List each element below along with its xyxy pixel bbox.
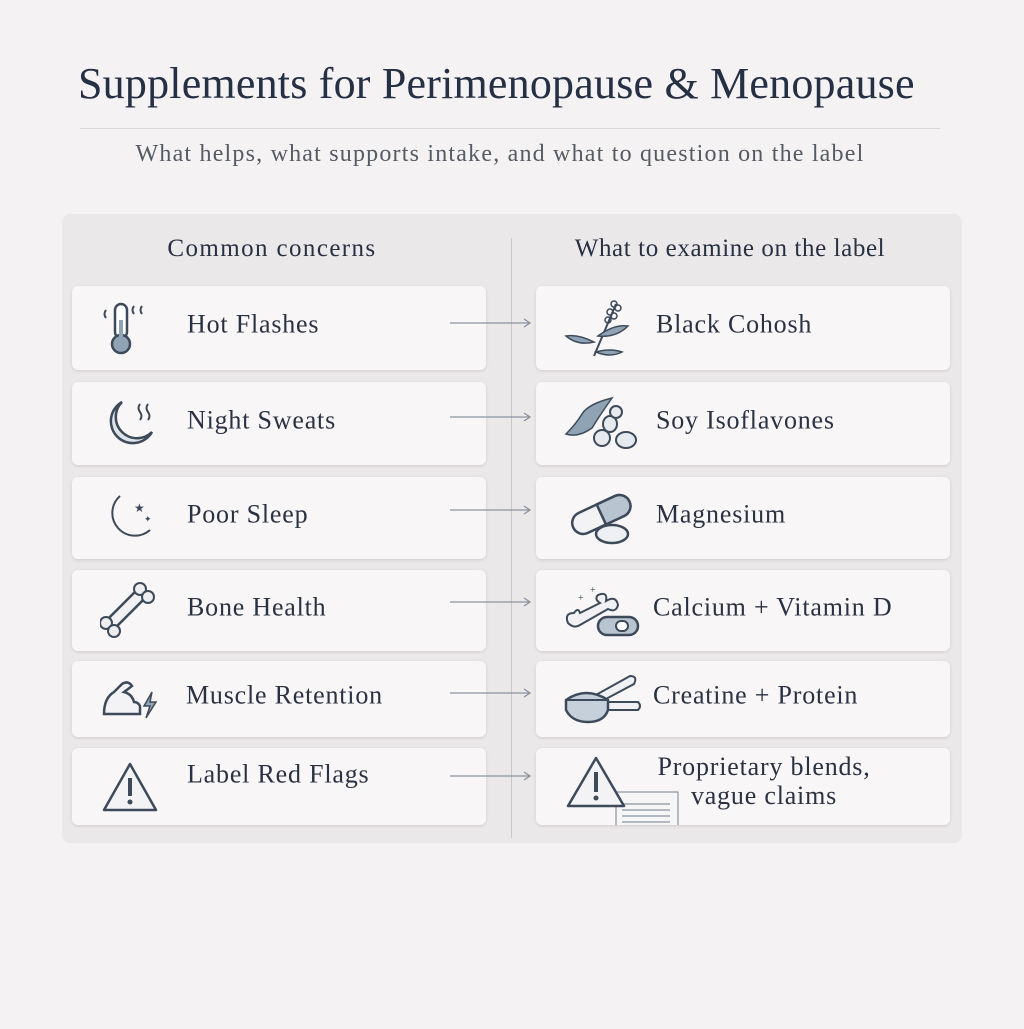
subtitle: What helps, what supports intake, and what to question on the label [136,141,864,167]
title: Supplements for Perimenopause & Menopause [78,59,915,108]
card: Hot Flashes: Hot Flashes [187,309,319,338]
card: Bone Health [72,570,486,651]
card: Proprietary blends [536,748,950,825]
card: Night Sweats: Night Sweats [187,405,336,434]
card: Night Sweats [72,382,486,465]
arrows [450,318,531,780]
card: Black Cohosh: Black Cohosh [656,309,812,338]
card: Black Cohosh [536,286,950,370]
card: Muscle Retention [72,661,486,737]
card: Poor Sleep: ✦ [144,514,152,524]
card: Calcium + Vitamin D: + [590,584,596,596]
card: Soy Isoflavones: Soy Isoflavones [656,405,835,434]
card: Muscle Retention: Muscle Retention [186,680,383,709]
heading: label: What to examine on the label [575,235,885,262]
card: Calcium + Vitamin D [536,570,950,651]
card: Proprietary blends: vague claims [691,781,837,810]
card: Bone Health: Bone Health [187,592,326,621]
heading: common concerns: Common concerns [167,235,377,262]
card: Creatine + Protein: Creatine + Protein [653,680,858,709]
card: Poor Sleep: Poor Sleep [187,499,308,528]
card: Soy Isoflavones [536,382,950,465]
card: Magnesium [536,477,950,559]
card: Hot Flashes [72,286,486,370]
card: Proprietary blends: Proprietary blends, [657,752,871,781]
card: Label Red Flags [72,748,486,825]
card: Calcium + Vitamin D: + [578,592,584,604]
card: Creatine + Protein [536,661,950,737]
card: Poor Sleep [72,477,486,559]
card: Calcium + Vitamin D: Calcium + Vitamin D [653,592,892,621]
card: Poor Sleep: ★ [134,501,145,515]
panel: main [62,214,962,843]
card: Label Red Flags: Label Red Flags [187,759,369,788]
card: Magnesium: Magnesium [656,499,786,528]
